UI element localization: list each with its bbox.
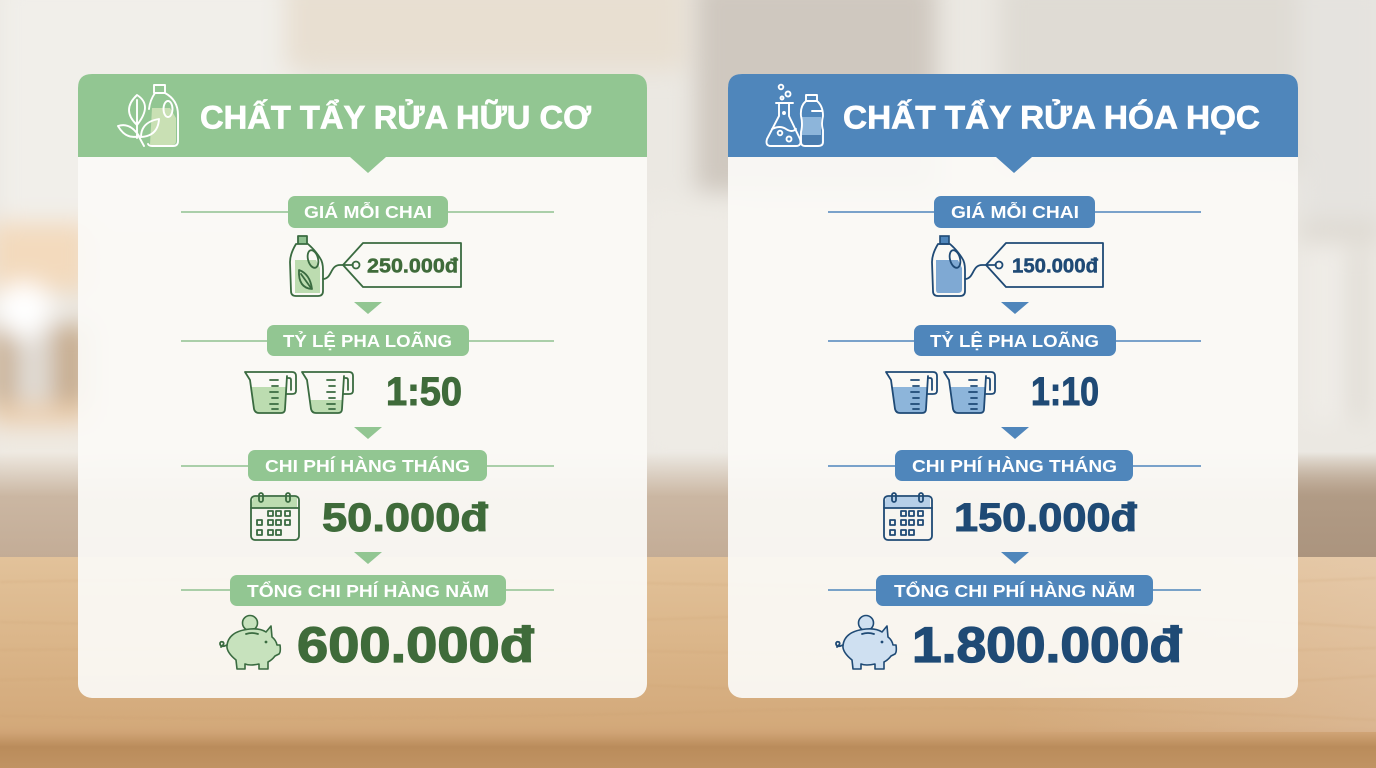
price tag bbox=[323, 243, 461, 287]
panel body bbox=[728, 74, 1298, 698]
arrow bbox=[1001, 552, 1029, 564]
icon: calendar bbox=[251, 493, 299, 540]
step: monthly cost bbox=[181, 450, 554, 481]
step: price per bottle bbox=[181, 196, 554, 228]
value: ratio: 1:10 bbox=[1031, 370, 1099, 414]
step: dilution ratio bbox=[828, 325, 1201, 356]
wooden counter bbox=[0, 557, 1376, 768]
icon: bottle bbox=[932, 236, 965, 296]
arrow bbox=[354, 302, 382, 314]
value: annual cost: 600.000đ bbox=[297, 617, 535, 673]
arrow bbox=[1001, 302, 1029, 314]
value: annual cost: 1.800.000đ bbox=[912, 617, 1182, 673]
panel: organic detergent bbox=[78, 74, 647, 698]
step: price per bottle bbox=[828, 196, 1201, 228]
icon: calendar bbox=[884, 493, 932, 540]
icon: piggy bank bbox=[220, 616, 280, 669]
price tag bbox=[965, 243, 1103, 287]
step: annual cost bbox=[181, 575, 554, 606]
step: dilution ratio: TỶ LỆ PHA LOÃNG bbox=[930, 330, 1099, 351]
arrow bbox=[354, 552, 382, 564]
step: annual cost: TỔNG CHI PHÍ HÀNG NĂM bbox=[247, 580, 489, 601]
step: monthly cost: CHI PHÍ HÀNG THÁNG bbox=[265, 455, 470, 476]
step: monthly cost bbox=[828, 450, 1201, 481]
price tag: 250.000đ bbox=[367, 256, 459, 278]
arrow bbox=[354, 427, 382, 439]
price tag: 150.000đ bbox=[1012, 256, 1099, 278]
icon: bottle with leaf bbox=[290, 236, 323, 296]
heading: CHẤT TẨY RỬA HÓA HỌC bbox=[843, 100, 1260, 136]
panel header bbox=[728, 74, 1298, 173]
panel header bbox=[78, 74, 647, 173]
panel: chemical detergent bbox=[728, 74, 1298, 698]
step: annual cost bbox=[828, 575, 1201, 606]
value: monthly cost: 150.000đ bbox=[954, 496, 1138, 540]
step: price per bottle: GIÁ MỖI CHAI bbox=[304, 201, 432, 222]
step: annual cost: TỔNG CHI PHÍ HÀNG NĂM bbox=[894, 580, 1135, 601]
icon: flask and bottle bbox=[766, 85, 823, 146]
icon: measuring cups bbox=[245, 372, 353, 413]
step: dilution ratio bbox=[181, 325, 554, 356]
step: dilution ratio: TỶ LỆ PHA LOÃNG bbox=[283, 330, 452, 351]
value: monthly cost: 50.000đ bbox=[322, 496, 489, 540]
icon: leaves and bottle bbox=[118, 85, 178, 146]
arrow bbox=[1001, 427, 1029, 439]
heading: CHẤT TẨY RỬA HỮU CƠ bbox=[200, 100, 592, 136]
icon: piggy bank bbox=[836, 616, 896, 669]
step: price per bottle: GIÁ MỖI CHAI bbox=[951, 201, 1079, 222]
icon: measuring cups bbox=[886, 372, 995, 413]
wall base bbox=[0, 452, 1376, 558]
step: monthly cost: CHI PHÍ HÀNG THÁNG bbox=[912, 455, 1117, 476]
panel body bbox=[78, 74, 647, 698]
value: ratio: 1:50 bbox=[386, 370, 462, 414]
